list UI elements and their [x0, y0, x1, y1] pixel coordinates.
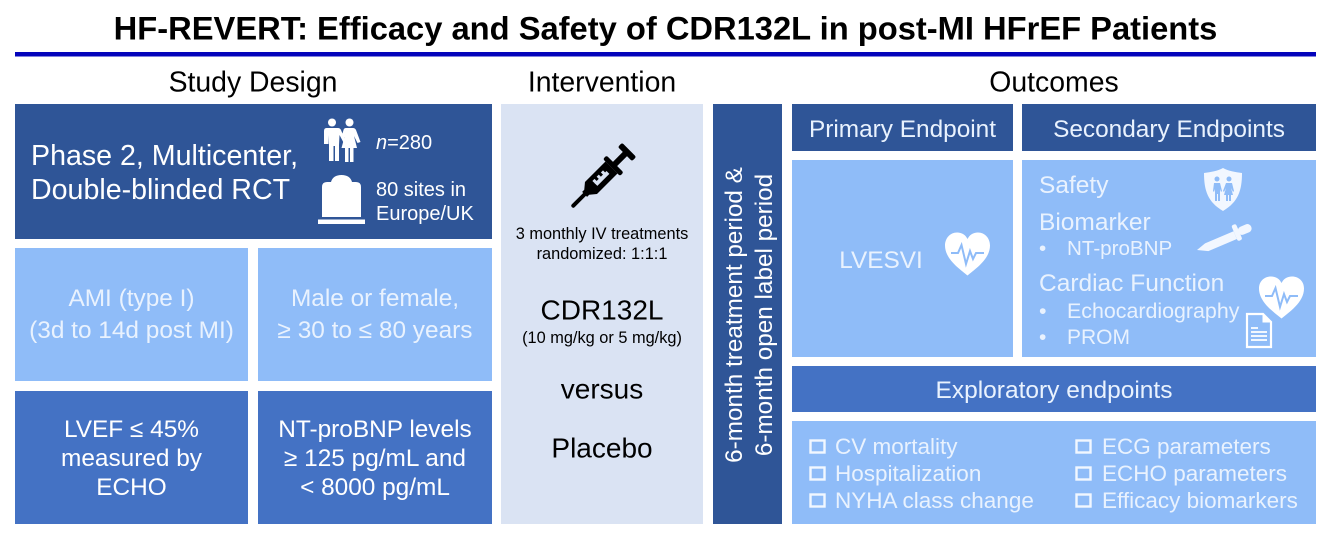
- biomarker list: •: [1039, 237, 1046, 260]
- study type text: Double-blinded RCT: [31, 174, 290, 206]
- treatment schedule: randomized: 1:1:1: [537, 245, 667, 263]
- sites text: Europe/UK: [376, 203, 474, 225]
- panel: study period: 6-month treatment period &: [721, 167, 748, 463]
- cardiac function list: PROM: [1067, 326, 1130, 349]
- left checklist: NYHA class change: [835, 488, 1034, 513]
- panel: NT-proBNP criterion: ≥ 125 pg/mL and: [284, 445, 466, 472]
- panel: primary endpoint: LVESVI: [839, 247, 923, 274]
- header: exploratory endpoints: [792, 366, 1316, 412]
- right checklist: [1076, 434, 1298, 513]
- cardiac function list: Echocardiography: [1067, 299, 1240, 323]
- panel: AMI criterion: AMI (type I): [68, 285, 195, 312]
- study type text: [31, 140, 298, 206]
- cardiac function list: •: [1039, 299, 1046, 323]
- sites text: [376, 179, 474, 225]
- drug name: CDR132L: [541, 294, 663, 326]
- versus: versus: [561, 374, 643, 404]
- icon: shield with people: [1204, 168, 1242, 211]
- panel: study period: 6-month open label period: [751, 174, 778, 456]
- heading: outcomes: Outcomes: [989, 66, 1119, 98]
- icon: syringe: [563, 141, 638, 216]
- panel: primary endpoint: [792, 160, 1013, 357]
- icon: heart with pulse: [1259, 276, 1304, 318]
- left checklist: Hospitalization: [835, 461, 981, 486]
- panel: study design summary: [15, 104, 492, 239]
- header: primary endpoint: [792, 104, 1013, 151]
- panel: intervention: [501, 104, 703, 524]
- panel: sex and age criterion: ≥ 30 to ≤ 80 years: [278, 317, 472, 344]
- dose: (10 mg/kg or 5 mg/kg): [522, 329, 682, 347]
- panel: LVEF criterion: ECHO: [96, 474, 167, 501]
- panel: sex and age criterion: Male or female,: [291, 285, 459, 312]
- icon: hospital building: [318, 175, 365, 224]
- safety: Safety: [1039, 172, 1109, 199]
- panel: sex and age criterion: [258, 248, 492, 381]
- right checklist: ECHO parameters: [1102, 461, 1287, 486]
- panel: LVEF criterion: [15, 391, 248, 524]
- icon: heart with pulse: [945, 232, 990, 276]
- header: secondary endpoints: [1022, 104, 1316, 151]
- biomarker: Biomarker: [1039, 209, 1151, 236]
- header: exploratory endpoints: Exploratory endpoints: [936, 377, 1172, 404]
- title: HF-REVERT: Efficacy and Safety of CDR132L in post-MI HFrEF Patients: [114, 10, 1217, 46]
- treatment schedule: [516, 225, 688, 263]
- panel: LVEF criterion: measured by: [61, 445, 203, 472]
- sample size: n=280: [376, 132, 432, 154]
- title rule: [15, 52, 1316, 56]
- panel: LVEF criterion: LVEF ≤ 45%: [64, 416, 199, 443]
- icon: dropper: [1193, 219, 1254, 257]
- panel: AMI criterion: [15, 248, 248, 381]
- panel: NT-proBNP criterion: [258, 391, 492, 524]
- panel: AMI criterion: (3d to 14d post MI): [29, 317, 234, 344]
- heading: study design: Study Design: [169, 66, 337, 98]
- cardiac function list: [1039, 299, 1240, 349]
- icon: man and woman: [324, 118, 360, 162]
- cardiac function list: •: [1039, 326, 1046, 349]
- treatment schedule: 3 monthly IV treatments: [516, 225, 688, 243]
- header: primary endpoint: Primary Endpoint: [809, 116, 996, 143]
- right checklist: ECG parameters: [1102, 434, 1271, 459]
- icon: document: [1247, 314, 1271, 347]
- panel: exploratory endpoints: [792, 421, 1316, 524]
- heading: intervention: Intervention: [528, 66, 676, 98]
- sites text: 80 sites in: [376, 179, 466, 201]
- header: secondary endpoints: Secondary Endpoints: [1053, 116, 1285, 143]
- left checklist: [810, 434, 1034, 513]
- placebo: Placebo: [551, 432, 653, 464]
- panel: study period: [713, 104, 782, 524]
- panel: secondary endpoints: [1022, 160, 1316, 357]
- biomarker list: NT-proBNP: [1067, 237, 1172, 260]
- study type text: Phase 2, Multicenter,: [31, 140, 298, 172]
- right checklist: Efficacy biomarkers: [1102, 488, 1298, 513]
- panel: NT-proBNP criterion: < 8000 pg/mL: [300, 474, 450, 501]
- left checklist: CV mortality: [835, 434, 958, 459]
- cardiac function: Cardiac Function: [1039, 270, 1224, 297]
- panel: NT-proBNP criterion: NT-proBNP levels: [278, 416, 472, 443]
